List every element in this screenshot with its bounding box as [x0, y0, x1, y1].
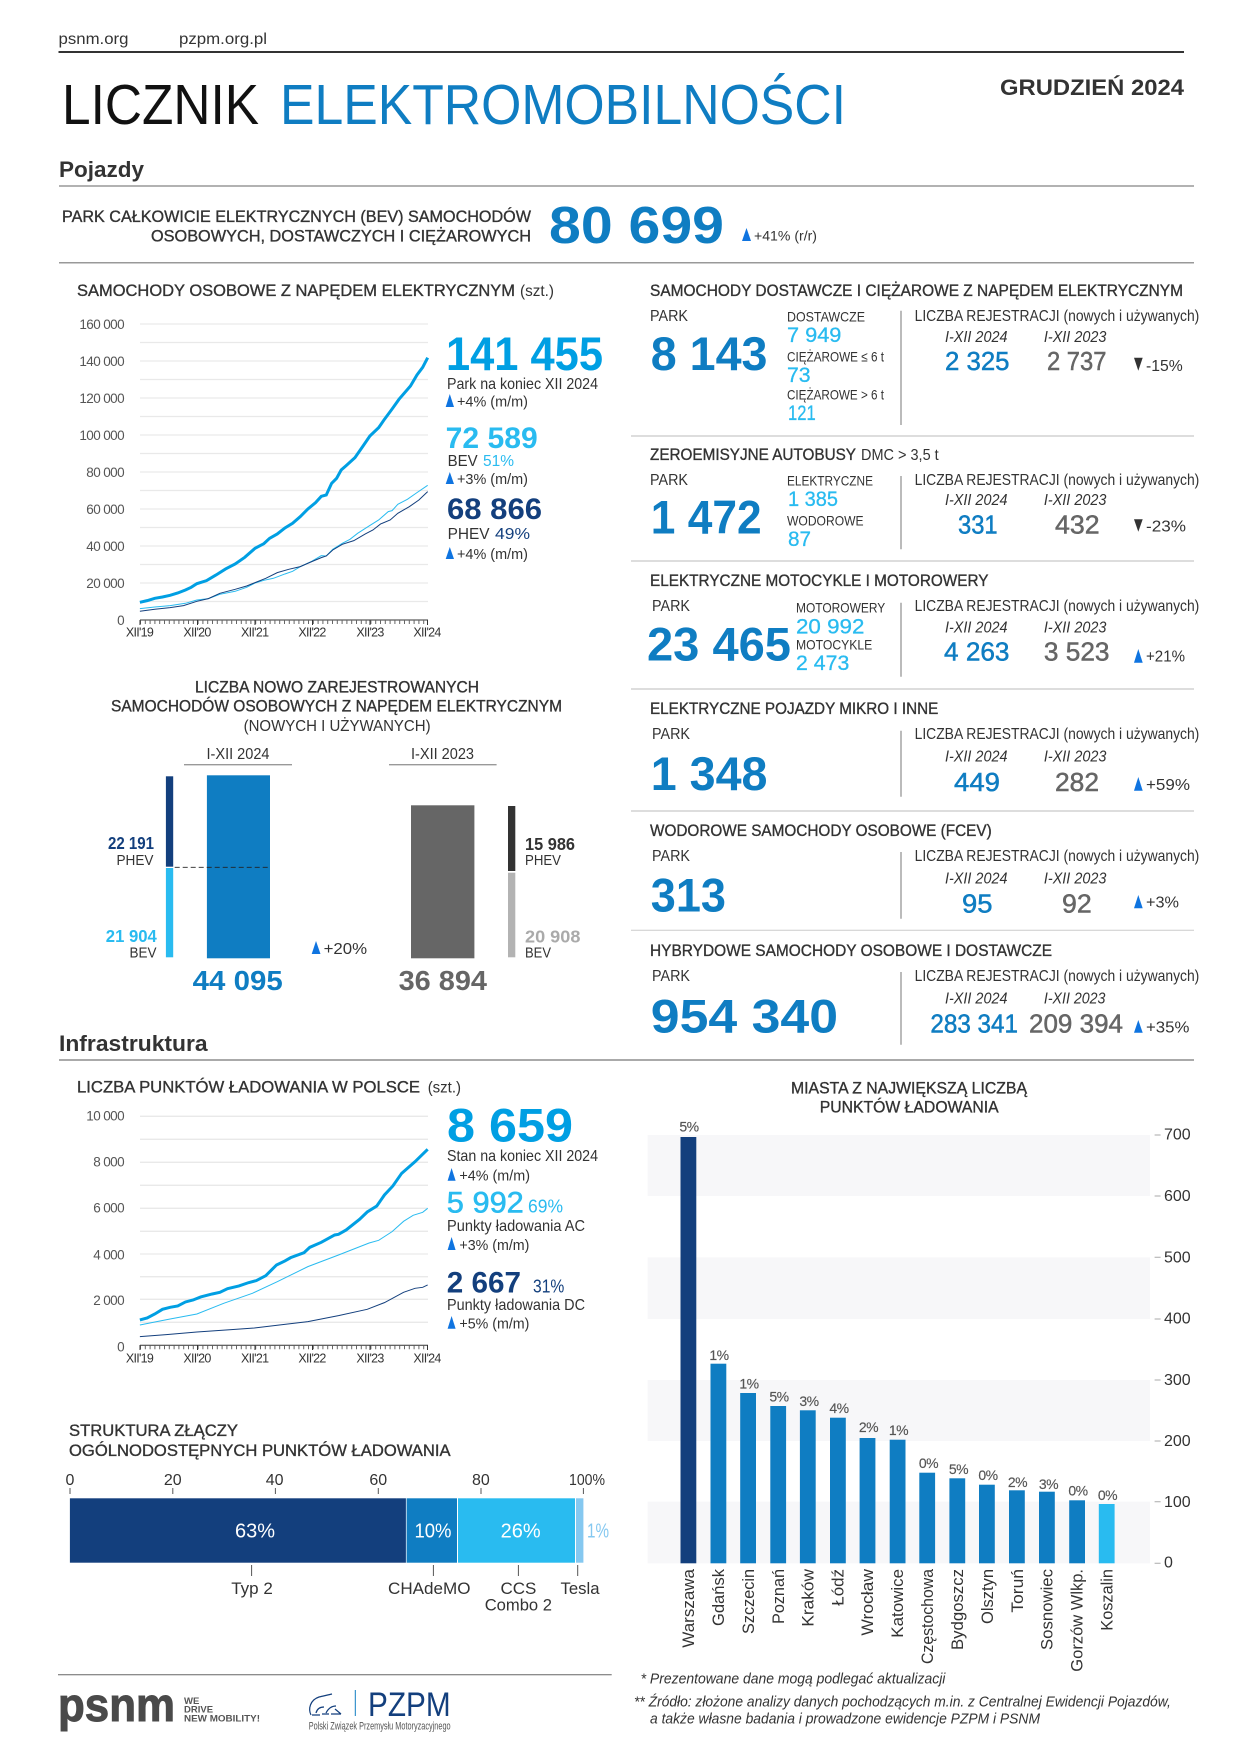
stacked bar segments: 10% [414, 1520, 452, 1542]
stat: PHEV: 68 866 [447, 493, 542, 526]
x axis: XII'23 [356, 626, 384, 640]
2023 column [389, 746, 581, 996]
value axis: 400 [1164, 1310, 1191, 1328]
section heading: Pojazdy: Pojazdy [59, 157, 145, 182]
panel: zero-emission buses: WODOROWE [787, 512, 864, 528]
stacked bar segments [70, 1498, 609, 1563]
logo: PSNM: DRIVE [184, 1705, 213, 1716]
panel: vans and trucks: 2 325 [945, 346, 1010, 376]
panel: city bar chart [648, 1078, 1191, 1672]
stat: PHEV: PHEV [448, 526, 490, 543]
panel: electric motorcycles and mopeds: PARK [652, 598, 690, 615]
panel: vans and trucks: 8 143 [651, 328, 768, 381]
bar percent labels [679, 1119, 1117, 1503]
value axis: 100 [1164, 1494, 1191, 1511]
panel: micro vehicles and other: ELEKTRYCZNE POJAZDY MIKRO I INNE [650, 699, 938, 718]
bar percent labels: 4% [829, 1400, 849, 1416]
logo: PSNM [58, 1678, 260, 1731]
x axis: XII'22 [298, 1352, 326, 1366]
x axis [126, 1345, 441, 1366]
panel: electric motorcycles and mopeds: I-XII 2023 [1044, 619, 1107, 636]
logo: PZPM [309, 1686, 451, 1732]
panel: micro vehicles and other [650, 699, 1199, 801]
chart title [791, 1078, 1028, 1116]
percent axis [66, 1472, 605, 1494]
panel: micro vehicles and other: 449 [954, 767, 1000, 797]
panel: vans and trucks: DOSTAWCZE [787, 308, 865, 324]
stacked bar segments: 26% [501, 1520, 541, 1542]
bar percent labels: 5% [679, 1119, 699, 1135]
2023 column: BEV [525, 945, 551, 962]
2023 column: PHEV [525, 852, 561, 869]
footnotes: ** Źródło: złożone analizy danych pochodzących m.in. z Centralnej Ewidencji Pojazdów, [634, 1694, 1171, 1711]
panel: vans and trucks [650, 281, 1199, 425]
y axis labels: 4 000 [93, 1247, 124, 1262]
connector labels: CHAdeMO [388, 1579, 470, 1598]
bars [680, 1137, 1115, 1563]
title: ELEKTROMOBILNOŚCI [280, 72, 846, 137]
panel: micro vehicles and other: PARK [652, 726, 690, 743]
city names: Toruń [1008, 1569, 1027, 1613]
panel: hydrogen passenger cars: WODOROWE SAMOCHODY OSOBOWE (FCEV) [650, 821, 992, 840]
stacked bar segments: 63% [235, 1520, 275, 1542]
bar percent labels: 0% [978, 1467, 998, 1483]
2023 column: I-XII 2023 [411, 746, 474, 763]
header links: pzpm.org.pl [179, 31, 267, 48]
panel: zero-emission buses [650, 445, 1199, 551]
stat: BEV: +3% (m/m) [457, 471, 528, 488]
growth indicator: +20% [324, 941, 367, 958]
connector labels: Tesla [560, 1579, 600, 1598]
2024 column: 22 191 [108, 833, 154, 853]
y axis labels: 0 [117, 1339, 124, 1354]
panel: zero-emission buses: 331 [958, 509, 998, 539]
panel: electric motorcycles and mopeds: MOTOCYKLE [796, 636, 872, 652]
stat: AC points: Punkty ładowania AC [447, 1218, 585, 1235]
city names: Kraków [798, 1568, 818, 1627]
headline BEV fleet: +41% (r/r) [754, 228, 817, 244]
logo: PSNM: NEW MOBILITY! [184, 1714, 260, 1725]
panel: micro vehicles and other: I-XII 2024 [945, 748, 1008, 765]
stat: AC points: +3% (m/m) [459, 1237, 529, 1254]
bar percent labels: 5% [769, 1388, 789, 1404]
panel: zero-emission buses: LICZBA REJESTRACJI (nowych i używanych) [915, 472, 1199, 489]
stat: DC points: 2 667 [447, 1267, 521, 1300]
stat: total passenger EV fleet: 141 455 [446, 328, 603, 381]
panel: electric motorcycles and mopeds: 4 263 [944, 637, 1010, 667]
panel: hybrid passenger cars and vans: LICZBA REJESTRACJI (nowych i używanych) [915, 968, 1199, 985]
footnotes: a także własne badania i prowadzone ewidencje PZPM i PSNM [650, 1711, 1040, 1728]
percent axis: 80 [472, 1472, 490, 1489]
stat: DC points: Punkty ładowania DC [447, 1297, 585, 1314]
chart title: LICZBA PUNKTÓW ŁADOWANIA W POLSCE [77, 1078, 420, 1097]
stat: AC points [447, 1187, 585, 1254]
stat: BEV: 72 589 [446, 422, 538, 455]
x axis: XII'23 [356, 1352, 384, 1366]
chart title: MIASTA Z NAJWIĘKSZĄ LICZBĄ [791, 1078, 1028, 1097]
panel: zero-emission buses: 1 472 [651, 491, 762, 544]
panel: vans and trucks: PARK [650, 308, 688, 325]
y axis labels: 80 000 [86, 465, 124, 480]
y axis labels: 20 000 [86, 576, 124, 591]
panel: electric motorcycles and mopeds [647, 571, 1199, 677]
panel: vans and trucks: 7 949 [787, 324, 841, 347]
panel: connector structure stacked bar [66, 1421, 609, 1615]
panel: hydrogen passenger cars: 95 [962, 888, 992, 918]
bar percent labels: 2% [859, 1419, 878, 1435]
y axis labels: 40 000 [86, 539, 124, 554]
stat: BEV: BEV [448, 453, 478, 470]
bar percent labels: 0% [1098, 1487, 1117, 1503]
panel: vans and trucks: CIĘŻAROWE > 6 t [787, 385, 884, 402]
chart title: (szt.) [428, 1080, 461, 1097]
bar percent labels: 2% [1008, 1474, 1027, 1490]
panel: electric motorcycles and mopeds: ELEKTRYCZNE MOTOCYKLE I MOTOROWERY [650, 571, 988, 590]
panel: vans and trucks: 2 737 [1047, 346, 1106, 376]
panel: electric motorcycles and mopeds: 23 465 [647, 619, 791, 672]
panel: micro vehicles and other: 282 [1055, 767, 1099, 797]
bar percent labels: 0% [919, 1455, 938, 1471]
city names: Olsztyn [978, 1569, 997, 1624]
panel: micro vehicles and other: +59% [1146, 777, 1190, 794]
y axis labels: 120 000 [79, 391, 124, 406]
panel: hybrid passenger cars and vans: 283 341 [930, 1009, 1018, 1039]
stat: PHEV: +4% (m/m) [457, 546, 528, 563]
chart title: STRUKTURA ZŁĄCZY [69, 1421, 238, 1440]
stat: DC points: 31% [533, 1277, 564, 1297]
panel: passenger EV line chart [77, 281, 603, 640]
title [62, 72, 846, 137]
panel: vans and trucks: I-XII 2023 [1044, 329, 1107, 346]
x axis: XII'20 [183, 1352, 211, 1366]
percent axis: 100% [569, 1472, 605, 1489]
panel: vans and trucks: -15% [1146, 358, 1183, 375]
stat: DC points [447, 1267, 585, 1333]
panel: zero-emission buses: PARK [650, 472, 688, 489]
city names: Koszalin [1098, 1569, 1116, 1631]
stat: total passenger EV fleet: Park na koniec XII 2024 [447, 376, 598, 393]
2024 column: 21 904 [106, 926, 157, 946]
stat: AC points: 5 992 [447, 1187, 524, 1220]
chart title: SAMOCHODÓW OSOBOWYCH Z NAPĘDEM ELEKTRYCZNYM [111, 697, 562, 716]
panel: vans and trucks: SAMOCHODY DOSTAWCZE I CIĘŻAROWE Z NAPĘDEM ELEKTRYCZNYM [650, 281, 1183, 300]
2024 column: BEV [130, 944, 156, 961]
panel: zero-emission buses: -23% [1146, 519, 1186, 536]
chart title: PUNKTÓW ŁADOWANIA [820, 1097, 999, 1116]
value axis: 600 [1164, 1188, 1191, 1205]
panel: hydrogen passenger cars: 92 [1062, 888, 1092, 918]
y axis labels: 140 000 [79, 354, 124, 369]
bar percent labels: 1% [709, 1347, 729, 1363]
stat: PHEV [446, 493, 542, 563]
y axis labels: 8 000 [93, 1155, 124, 1170]
stat: total points: +4% (m/m) [459, 1168, 530, 1185]
panel: zero-emission buses: I-XII 2024 [945, 492, 1008, 509]
city names: Warszawa [679, 1568, 698, 1648]
panel: hydrogen passenger cars: I-XII 2023 [1044, 870, 1107, 887]
y axis labels: 60 000 [86, 502, 124, 517]
y axis labels: 0 [117, 613, 124, 628]
panel: hybrid passenger cars and vans: HYBRYDOWE SAMOCHODY OSOBOWE I DOSTAWCZE [650, 941, 1052, 960]
city names: Poznań [769, 1569, 788, 1624]
bar percent labels: 5% [949, 1461, 968, 1477]
x axis: XII'24 [413, 626, 441, 640]
stat: AC points: 69% [528, 1197, 563, 1217]
2024 column: 44 095 [193, 965, 283, 996]
city names [679, 1568, 1116, 1672]
chart title: LICZBA NOWO ZAREJESTROWANYCH [195, 678, 479, 697]
2023 column: 15 986 [525, 834, 575, 854]
headline BEV fleet: 80 699 [549, 197, 724, 255]
city names: Gdańsk [709, 1569, 728, 1626]
panel: hydrogen passenger cars: +3% [1146, 895, 1179, 912]
city names: Wrocław [858, 1568, 877, 1636]
panel: micro vehicles and other: 1 348 [651, 748, 768, 801]
stat: DC points: +5% (m/m) [459, 1316, 529, 1333]
y axis labels [86, 1109, 124, 1354]
chart title: (NOWYCH I UŻYWANYCH) [244, 716, 431, 735]
connector labels: Typ 2 [231, 1579, 273, 1598]
y axis labels: 10 000 [86, 1109, 124, 1124]
panel: hybrid passenger cars and vans: I-XII 2023 [1044, 990, 1106, 1007]
city names: Łódź [828, 1569, 848, 1606]
x axis: XII'21 [241, 1352, 269, 1366]
panel: vans and trucks: I-XII 2024 [945, 329, 1008, 346]
percent axis: 0 [66, 1472, 75, 1489]
2023 column: 36 894 [399, 965, 487, 996]
logo: PSNM: WE [184, 1696, 199, 1707]
x axis: XII'19 [126, 626, 154, 640]
bar percent labels: 3% [1039, 1476, 1058, 1492]
panel: hybrid passenger cars and vans: PARK [652, 968, 690, 985]
panel: vans and trucks: 121 [788, 402, 816, 425]
panel: electric motorcycles and mopeds: 3 523 [1044, 637, 1110, 667]
x axis: XII'21 [241, 626, 269, 640]
panel: hydrogen passenger cars: 313 [651, 870, 726, 923]
panel: vans and trucks: 73 [787, 364, 811, 387]
y axis labels: 160 000 [79, 317, 124, 332]
panel: charging points line chart [77, 1078, 598, 1366]
headline BEV fleet: OSOBOWYCH, DOSTAWCZYCH I CIĘŻAROWYCH [151, 227, 531, 246]
y axis labels: 100 000 [79, 428, 124, 443]
percent axis: 40 [266, 1472, 284, 1489]
connector labels: Combo 2 [485, 1596, 552, 1615]
logo: PSNM: psnm [58, 1678, 175, 1731]
panel: hybrid passenger cars and vans: 954 340 [651, 991, 838, 1044]
panel: zero-emission buses: 87 [788, 528, 811, 551]
bar percent labels: 0% [1068, 1482, 1088, 1498]
panel: zero-emission buses: 1 385 [788, 488, 838, 511]
panel: hybrid passenger cars and vans: I-XII 2024 [945, 990, 1008, 1007]
stat: total points: 8 659 [447, 1100, 573, 1153]
stat: total points: Stan na koniec XII 2024 [447, 1148, 598, 1165]
date: GRUDZIEŃ 2024 [1000, 75, 1185, 100]
stat: total points [447, 1100, 598, 1185]
panel: zero-emission buses: I-XII 2023 [1044, 492, 1107, 509]
2024 column: I-XII 2024 [206, 746, 270, 763]
panel: micro vehicles and other: LICZBA REJESTRACJI (nowych i używanych) [915, 726, 1199, 743]
city names: Szczecin [739, 1569, 758, 1634]
panel: electric motorcycles and mopeds: +21% [1146, 649, 1185, 666]
2024 column [106, 746, 292, 996]
x axis: XII'20 [183, 626, 211, 640]
panel: electric motorcycles and mopeds: I-XII 2024 [945, 619, 1008, 636]
value axis: 700 [1164, 1126, 1191, 1144]
2023 column: 20 908 [525, 927, 581, 947]
value axis: 500 [1164, 1250, 1191, 1266]
panel: electric motorcycles and mopeds: LICZBA REJESTRACJI (nowych i używanych) [915, 598, 1199, 615]
footnotes [634, 1670, 1171, 1728]
city names: Gorzów Wlkp. [1068, 1569, 1086, 1672]
panel: hybrid passenger cars and vans [650, 941, 1199, 1045]
stacked bar segments: 1% [587, 1520, 609, 1542]
city names: Sosnowiec [1038, 1569, 1056, 1650]
y axis labels: 6 000 [93, 1201, 124, 1216]
panel: hydrogen passenger cars: PARK [652, 848, 690, 865]
panel: vans and trucks: CIĘŻAROWE ≤ 6 t [787, 347, 884, 364]
panel: electric motorcycles and mopeds: MOTOROWERY [796, 599, 886, 615]
percent axis: 60 [369, 1472, 387, 1489]
data lines: total, AC, DC [140, 1149, 428, 1337]
panel: electric motorcycles and mopeds: 20 992 [796, 615, 864, 638]
headline BEV fleet: PARK CAŁKOWICIE ELEKTRYCZNYCH (BEV) SAMOCHODÓW [62, 207, 531, 226]
chart title: SAMOCHODY OSOBOWE Z NAPĘDEM ELEKTRYCZNYM [77, 281, 515, 300]
city names: Częstochowa [918, 1569, 937, 1664]
y axis labels [79, 317, 124, 628]
panel: hydrogen passenger cars: LICZBA REJESTRACJI (nowych i używanych) [915, 848, 1199, 865]
logo: PZPM: Polski Związek Przemysłu Motoryzacyjnego [309, 1720, 451, 1732]
panel: hybrid passenger cars and vans: +35% [1146, 1020, 1189, 1037]
percent axis: 20 [164, 1472, 182, 1489]
panel: hydrogen passenger cars [650, 821, 1199, 923]
data lines: total, BEV, PHEV [140, 358, 428, 611]
x axis [126, 620, 441, 640]
panel: micro vehicles and other: I-XII 2023 [1044, 748, 1107, 765]
y axis labels: 2 000 [93, 1293, 124, 1308]
stat: total passenger EV fleet: +4% (m/m) [457, 394, 528, 411]
2024 column: PHEV [116, 852, 154, 869]
chart title [69, 1421, 451, 1460]
x axis: XII'24 [413, 1352, 441, 1366]
panel: zero-emission buses: DMC > 3,5 t [861, 447, 939, 464]
panel: electric motorcycles and mopeds: 2 473 [796, 652, 849, 675]
chart title: OGÓLNODOSTĘPNYCH PUNKTÓW ŁADOWANIA [69, 1441, 451, 1460]
panel: hydrogen passenger cars: I-XII 2024 [945, 870, 1008, 887]
city names: Bydgoszcz [948, 1569, 967, 1650]
connector labels [231, 1565, 600, 1615]
panel: zero-emission buses: ZEROEMISYJNE AUTOBUSY [650, 445, 856, 464]
stat: BEV: 51% [483, 453, 514, 470]
panel: vans and trucks: LICZBA REJESTRACJI (nowych i używanych) [915, 308, 1199, 325]
x axis: XII'22 [298, 626, 326, 640]
bar percent labels: 1% [889, 1422, 908, 1438]
footnotes: * Prezentowane dane mogą podlegać aktualizacji [641, 1670, 946, 1687]
connector labels: CCS [500, 1579, 536, 1598]
panel: new registrations bar comparison [106, 678, 581, 996]
section heading: Infrastruktura: Infrastruktura [59, 1031, 208, 1056]
panel: zero-emission buses: 432 [1055, 509, 1100, 539]
stat: PHEV: 49% [495, 526, 530, 543]
panel: zero-emission buses: ELEKTRYCZNE [787, 472, 873, 488]
header links: psnm.org [58, 31, 128, 48]
panel: hybrid passenger cars and vans: 209 394 [1029, 1009, 1123, 1039]
stat: BEV [446, 422, 538, 488]
bar percent labels: 1% [739, 1376, 759, 1392]
x axis: XII'19 [126, 1352, 154, 1366]
logo: PZPM: PZPM [368, 1686, 451, 1724]
value axis: 200 [1164, 1433, 1191, 1450]
chart title [111, 678, 562, 735]
headline BEV fleet [59, 197, 1194, 263]
header links [58, 31, 1184, 52]
value axis: 0 [1164, 1554, 1173, 1572]
value axis [1155, 1126, 1191, 1572]
bar percent labels: 3% [799, 1393, 819, 1409]
title: LICZNIK [62, 73, 259, 137]
chart title: (szt.) [520, 283, 554, 300]
city names: Katowice [888, 1569, 907, 1638]
value axis: 300 [1164, 1372, 1191, 1389]
stat: total passenger EV fleet [446, 328, 603, 411]
